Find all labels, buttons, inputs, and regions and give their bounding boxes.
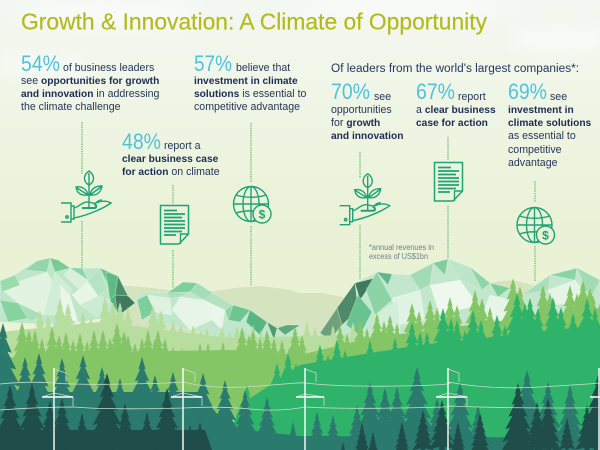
- icon: hand with plant left: [61, 171, 111, 222]
- stat: 69 percent: advantage: [508, 157, 558, 169]
- stat: 48 percent: for action on climate: [122, 166, 220, 178]
- heading: largest companies: Of leaders from the world's largest companies*:: [331, 63, 579, 75]
- stat: 70 percent: opportunities: [331, 104, 392, 116]
- stat: 69 percent: see: [550, 91, 567, 103]
- stat: 67 percent: report: [458, 91, 486, 103]
- clouds: [0, 0, 600, 75]
- stat: 69 percent: competitive: [508, 144, 562, 156]
- stat: 67 percent: [416, 79, 496, 129]
- mountain left: [0, 258, 135, 325]
- stat: 54 percent: see opportunities for growth: [21, 75, 159, 87]
- stat: 70 percent: and innovation: [331, 131, 403, 142]
- bright green tree layer: [216, 293, 600, 450]
- stat: 54 percent: the climate challenge: [21, 101, 121, 113]
- icon: globe with dollar right: [517, 208, 554, 244]
- stat: 54 percent: and innovation in addressing: [21, 88, 160, 100]
- stat: 57 percent: solutions is essential to: [194, 88, 307, 100]
- stat: 69 percent: climate solutions: [508, 118, 592, 129]
- mountains: [0, 258, 600, 345]
- stat: 48 percent: report a: [164, 140, 201, 152]
- dotted connector lines: [82, 122, 535, 288]
- stat: 67 percent: 67%: [416, 79, 455, 104]
- footnote: excess of US$1bn: [369, 251, 428, 261]
- stat: 57 percent: investment in climate: [194, 76, 298, 87]
- stat: 69 percent: as essential to: [508, 130, 576, 142]
- stat: 67 percent: case for action: [416, 118, 488, 129]
- mountain center: [135, 282, 300, 345]
- stat: 48 percent: clear business case: [122, 154, 219, 165]
- stat: 70 percent: [331, 79, 403, 142]
- stat: 69 percent: [508, 79, 592, 169]
- stat: 48 percent: [122, 129, 220, 178]
- stat: 57 percent: competitive advantage: [194, 101, 300, 113]
- icon: globe with dollar left: [234, 186, 271, 223]
- mid green tree layer: [0, 278, 600, 420]
- icon: document left: [160, 206, 188, 244]
- forest layers: [0, 278, 600, 450]
- dark tree layer: [0, 373, 600, 450]
- stat: 70 percent: see: [374, 91, 391, 103]
- light tree layer: [0, 297, 373, 400]
- icon: document right: [434, 162, 462, 201]
- footnote: [369, 242, 434, 261]
- far hills: [118, 280, 560, 340]
- power lines: [0, 368, 600, 450]
- footnote: *annual revenues in: [369, 242, 434, 252]
- mountain right: [320, 259, 600, 345]
- stat: 57 percent: believe that: [236, 62, 290, 74]
- teal tree layer: [0, 323, 600, 450]
- stat: 57 percent: 57%: [194, 51, 232, 76]
- stat: 69 percent: investment in: [508, 105, 574, 116]
- stat: 54 percent: of business leaders: [63, 62, 154, 74]
- stat: 67 percent: a clear business: [416, 104, 496, 116]
- stat: 54 percent: 54%: [21, 51, 60, 76]
- stat: 54 percent: [21, 51, 160, 113]
- stat: 70 percent: for growth: [331, 117, 380, 129]
- stat: 57 percent: [194, 51, 307, 113]
- stat: 69 percent: 69%: [508, 79, 547, 104]
- icon: hand with plant right: [340, 174, 390, 225]
- stat: 48 percent: 48%: [122, 129, 161, 154]
- title: Growth & Innovation: A Climate of Opportunity: [21, 8, 487, 34]
- stat: 70 percent: 70%: [331, 79, 370, 104]
